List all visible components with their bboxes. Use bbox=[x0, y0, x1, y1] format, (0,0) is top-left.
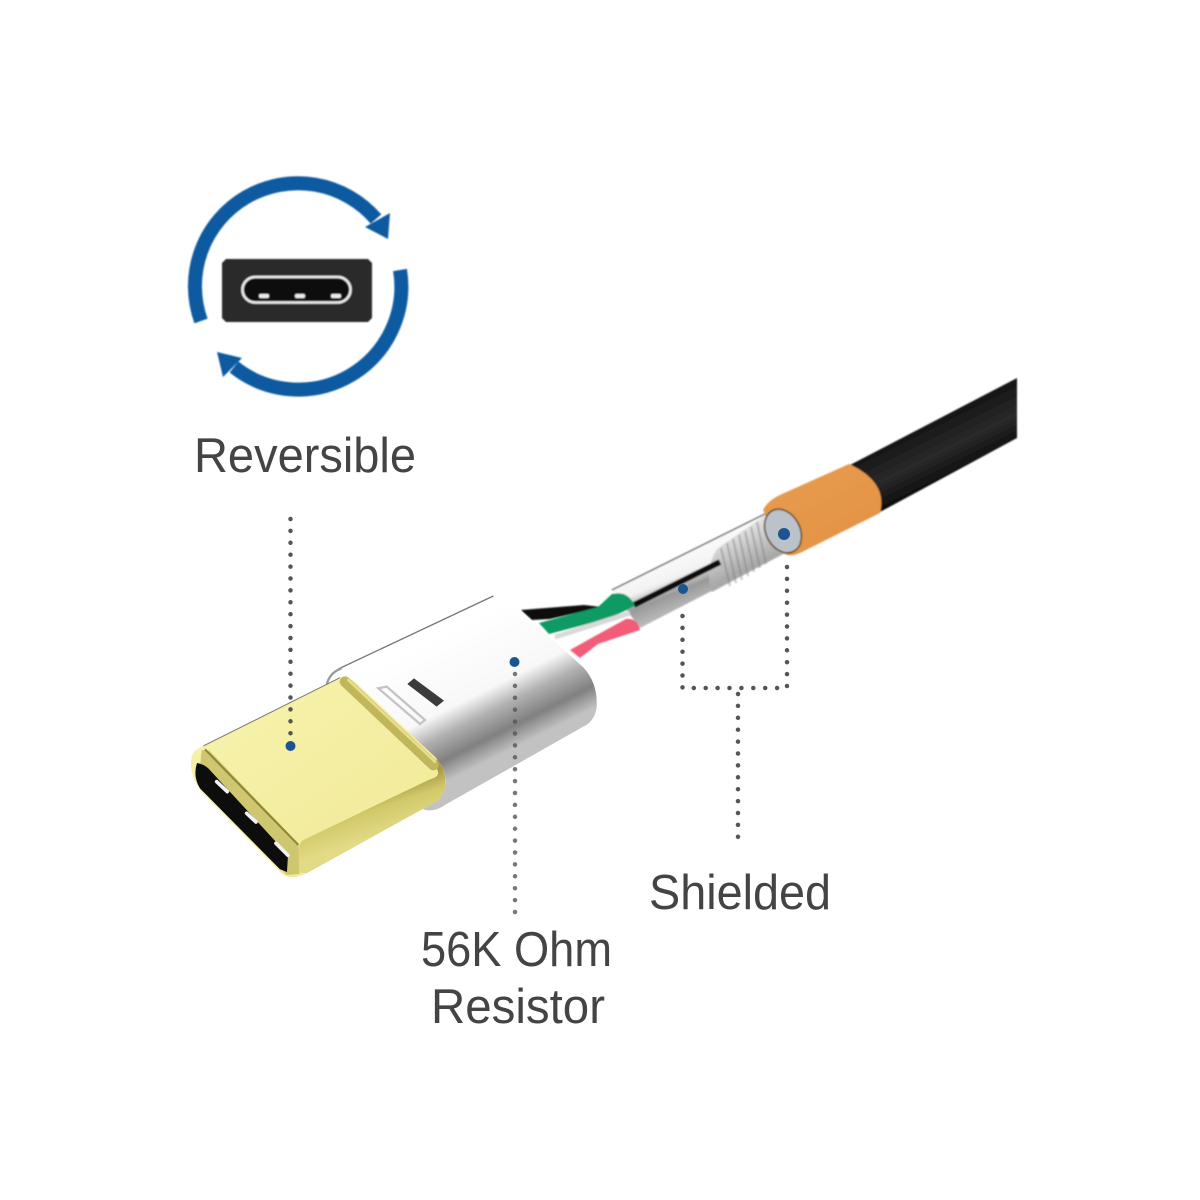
braided shield bbox=[709, 503, 809, 592]
label: Shielded: Shielded bbox=[649, 866, 831, 920]
gold connector shell bbox=[191, 677, 446, 877]
arrow: upper rotation bbox=[195, 183, 390, 321]
USB-C connector bbox=[191, 596, 597, 877]
label: 56K Ohm Resistor: Resistor bbox=[431, 980, 605, 1034]
callout line: reversible bbox=[286, 519, 296, 751]
gold front edge bbox=[198, 750, 299, 875]
black wire bbox=[521, 605, 602, 620]
green wire bbox=[539, 593, 635, 634]
housing recess bbox=[378, 687, 425, 724]
cable bbox=[521, 378, 1017, 658]
callout bracket: shielded bbox=[678, 528, 790, 838]
inner black wire bbox=[634, 562, 720, 605]
housing slot bbox=[407, 678, 444, 707]
white wire bbox=[555, 613, 630, 637]
icon: reversible connector bbox=[195, 183, 401, 390]
pink wire bbox=[570, 619, 640, 658]
callout line: resistor bbox=[510, 657, 520, 912]
silver foil tube bbox=[612, 515, 785, 628]
orange insulation bbox=[763, 464, 881, 555]
black outer jacket bbox=[848, 378, 1017, 512]
arrow: lower rotation bbox=[217, 270, 401, 390]
heading: Reversible: Reversible bbox=[194, 429, 416, 483]
gold rim band bbox=[298, 758, 445, 873]
silver housing bbox=[327, 596, 597, 811]
port opening bbox=[195, 763, 288, 872]
label: 56K Ohm Resistor: 56K Ohm bbox=[421, 923, 612, 977]
icon: USB-C port bbox=[222, 259, 372, 322]
label: 56K Ohm Resistor bbox=[421, 923, 612, 1034]
